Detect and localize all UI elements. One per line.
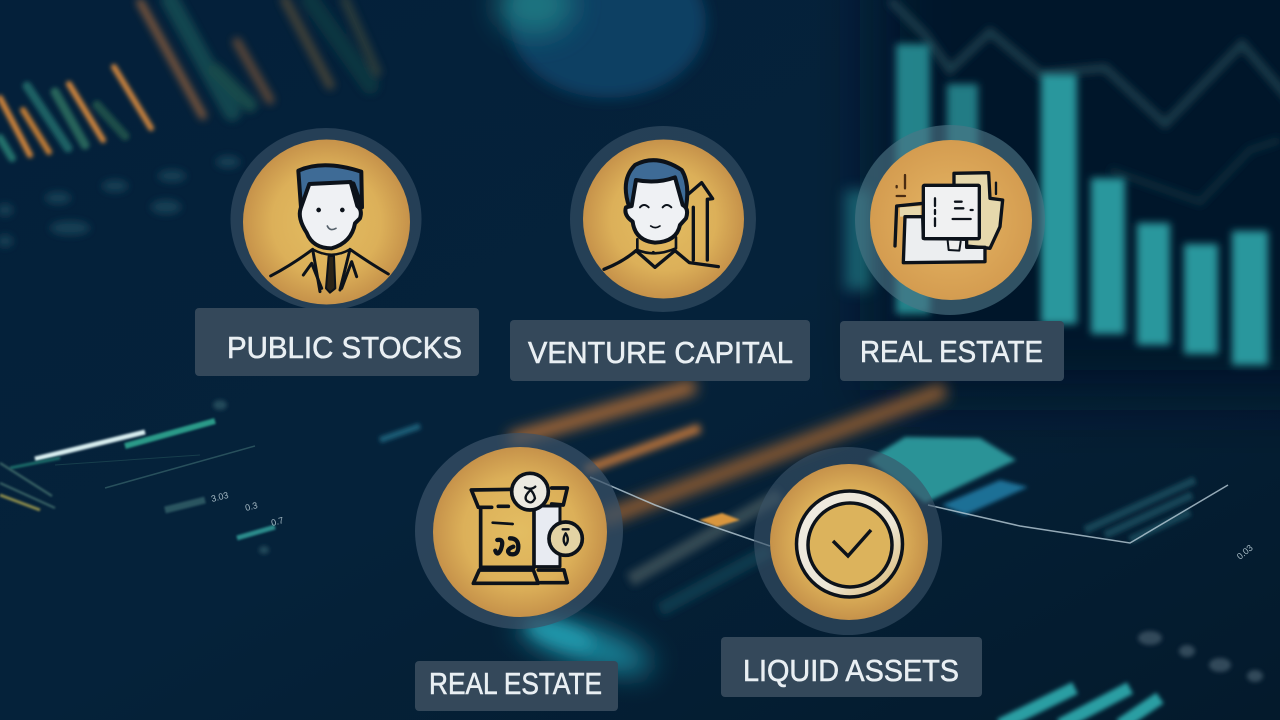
label: public stocks xyxy=(195,308,479,376)
background: bottom glow and bars xyxy=(513,606,1263,720)
gold disc xyxy=(870,140,1032,300)
icon: stacked property documents xyxy=(895,173,1003,263)
orange marker xyxy=(699,513,740,527)
label: real estate: REAL ESTATE xyxy=(860,334,1043,369)
ring xyxy=(855,125,1045,315)
panel: venture capital xyxy=(510,126,810,381)
label: real estate xyxy=(840,321,1064,381)
background: blurred line chart right xyxy=(890,0,1280,202)
gold disc xyxy=(433,447,607,617)
small chart figures xyxy=(210,490,1255,562)
background: globe blur xyxy=(497,0,706,98)
small chart figures: 0.3 xyxy=(244,500,259,513)
small chart figures: 3.03 xyxy=(210,490,229,504)
label: liquid assets: LIQUID ASSETS xyxy=(743,653,959,688)
gold disc xyxy=(243,140,410,304)
ring xyxy=(754,447,942,635)
icon: coin with check mark xyxy=(796,491,902,597)
small chart figures: 0.7 xyxy=(270,515,285,528)
icon: businessman in suit xyxy=(271,165,388,293)
ring xyxy=(415,433,623,629)
icon: founder with growth arrow xyxy=(604,160,718,269)
panel: liquid assets xyxy=(721,447,982,697)
small chart figures: 0.03 xyxy=(1235,543,1255,562)
label: real estate: REAL ESTATE xyxy=(429,666,602,701)
label: liquid assets xyxy=(721,637,982,697)
background: orange and teal bars lower right xyxy=(510,386,1228,610)
gold disc xyxy=(583,140,744,298)
ring xyxy=(230,128,422,310)
teal parallelogram xyxy=(868,437,1016,503)
label: venture capital xyxy=(510,320,810,381)
panel: public stocks xyxy=(195,128,479,376)
label: real estate xyxy=(415,661,618,711)
panel: real estate vault xyxy=(415,433,623,711)
label: public stocks: PUBLIC STOCKS xyxy=(227,330,462,365)
label: venture capital: VENTURE CAPITAL xyxy=(528,335,793,370)
background: blurred table dots left xyxy=(0,156,240,247)
ring xyxy=(570,126,756,312)
blue parallelogram xyxy=(942,480,1028,515)
panel: real estate documents xyxy=(840,125,1064,381)
icon: pillar with coins xyxy=(471,473,582,583)
gold disc xyxy=(770,464,928,620)
background: slanted bars upper left xyxy=(0,0,377,158)
thin white trend line xyxy=(590,477,1228,546)
background: teal bar chart right xyxy=(896,44,1268,365)
background: sharp chart details lower left xyxy=(0,400,1255,562)
